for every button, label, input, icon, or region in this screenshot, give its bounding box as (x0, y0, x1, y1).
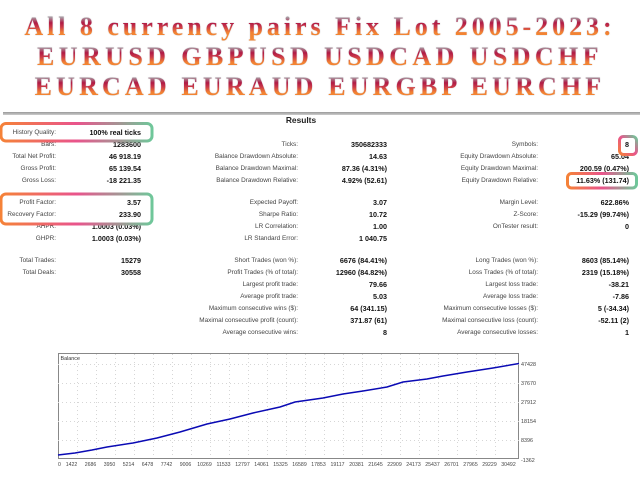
x axis labels: 16589 (292, 462, 307, 468)
y axis labels: 27912 (521, 400, 536, 406)
x axis labels: 0 (58, 462, 61, 468)
box: equity drawdown relative (568, 174, 636, 188)
left column statistics: GHPR: (36, 235, 56, 242)
left column statistics: Gross Loss: (22, 177, 56, 184)
middle column statistics: Largest profit trade: (243, 281, 298, 288)
x axis labels: 17853 (311, 462, 326, 468)
x axis labels: 9006 (180, 462, 191, 468)
left column statistics: 46 918.19 (109, 152, 141, 161)
right column statistics: Loss Trades (% of total): (469, 269, 538, 276)
right column statistics: 2319 (15.18%) (582, 268, 629, 277)
left column statistics: Total Net Profit: (12, 153, 56, 160)
middle column statistics: 3.07 (373, 198, 387, 207)
left column statistics (7, 128, 141, 277)
x axis labels (58, 462, 516, 468)
x axis labels: 7742 (161, 462, 172, 468)
right column statistics: Equity Drawdown Maximal: (461, 165, 538, 172)
middle column statistics: 1.00 (373, 222, 387, 231)
balance chart (58, 353, 536, 468)
middle column statistics: 10.72 (369, 210, 387, 219)
left column statistics: Recovery Factor: (7, 211, 56, 218)
right column statistics: 1 (625, 328, 629, 337)
left column statistics: AHPR: (36, 223, 56, 230)
middle column statistics (199, 140, 387, 337)
right column statistics: Maximal consecutive loss (count): (442, 317, 538, 324)
right column statistics: 11.63% (131.74) (576, 176, 629, 185)
x axis labels: 25437 (425, 462, 440, 468)
chart label: Balance (60, 356, 80, 362)
middle column statistics: Sharpe Ratio: (259, 211, 298, 218)
left column statistics: Total Deals: (23, 269, 56, 276)
middle column statistics: 350682333 (351, 140, 387, 149)
left column statistics: History Quality: (13, 129, 56, 136)
y axis labels: 47428 (521, 362, 536, 368)
x axis labels: 21645 (368, 462, 383, 468)
x axis labels: 29229 (482, 462, 497, 468)
left column statistics: 1.0003 (0.03%) (92, 222, 141, 231)
right column statistics: 0 (625, 222, 629, 231)
x axis labels: 12797 (235, 462, 250, 468)
x axis labels: 2686 (85, 462, 96, 468)
middle column statistics: 14.63 (369, 152, 387, 161)
right column statistics: 5 (-34.34) (598, 304, 629, 313)
middle column statistics: Balance Drawdown Relative: (216, 177, 298, 184)
right column statistics: -52.11 (2) (598, 316, 629, 325)
middle column statistics: 5.03 (373, 292, 387, 301)
left column statistics: 100% real ticks (89, 128, 141, 137)
left column statistics: Gross Profit: (20, 165, 56, 172)
right column statistics: OnTester result: (493, 223, 538, 230)
right column statistics: Long Trades (won %): (475, 257, 538, 264)
right column statistics (442, 140, 629, 337)
right column statistics: Symbols: (512, 141, 538, 148)
y axis labels (521, 362, 536, 464)
middle column statistics: 6676 (84.41%) (340, 256, 387, 265)
x axis labels: 1422 (66, 462, 77, 468)
left column statistics: 1283600 (113, 140, 141, 149)
box: profit and recovery factor (1, 194, 152, 224)
middle column statistics: Profit Trades (% of total): (227, 269, 298, 276)
title line 1: All 8 currency pairs Fix Lot 2005-2023: (24, 12, 616, 41)
middle column statistics: 12960 (84.82%) (336, 268, 387, 277)
y axis labels: 8396 (521, 438, 533, 444)
x axis labels: 27965 (463, 462, 478, 468)
title line 3: EURCAD EURAUD EURGBP EURCHF (35, 72, 605, 101)
x axis labels: 10269 (197, 462, 212, 468)
left column statistics: 3.57 (127, 198, 141, 207)
middle column statistics: Expected Payoff: (250, 199, 298, 206)
right column statistics: -38.21 (609, 280, 629, 289)
right column statistics: Average loss trade: (483, 293, 538, 300)
middle column statistics: 87.36 (4.31%) (342, 164, 387, 173)
y axis labels: -1362 (521, 458, 535, 464)
right column statistics: Equity Drawdown Relative: (462, 177, 538, 184)
middle column statistics: Maximum consecutive wins ($): (209, 305, 298, 312)
left column statistics: -18 221.35 (107, 176, 141, 185)
right column statistics: 622.86% (601, 198, 629, 207)
x axis labels: 5214 (123, 462, 134, 468)
right column statistics: 65.04 (611, 152, 629, 161)
x axis labels: 30492 (501, 462, 516, 468)
chart frame (58, 354, 518, 458)
right column statistics: Z-Score: (513, 211, 538, 218)
x axis labels: 11533 (216, 462, 231, 468)
x axis labels: 14061 (254, 462, 269, 468)
right column statistics: Maximum consecutive losses ($): (444, 305, 538, 312)
right column statistics: 8 (625, 140, 629, 149)
middle column statistics: Balance Drawdown Maximal: (216, 165, 298, 172)
middle column statistics: LR Standard Error: (244, 235, 298, 242)
right column statistics: -7.86 (613, 292, 629, 301)
middle column statistics: Average consecutive wins: (222, 329, 298, 336)
left column statistics: Profit Factor: (19, 199, 56, 206)
left column statistics: 1.0003 (0.03%) (92, 234, 141, 243)
x axis labels: 22909 (387, 462, 402, 468)
right column statistics: 8603 (85.14%) (582, 256, 629, 265)
x axis labels: 15325 (273, 462, 288, 468)
middle column statistics: Short Trades (won %): (234, 257, 298, 264)
x axis labels: 26701 (444, 462, 459, 468)
title line 2: EURUSD GBPUSD USDCAD USDCHF (37, 42, 603, 71)
middle column statistics: 8 (383, 328, 387, 337)
y axis labels: 18154 (521, 419, 536, 425)
middle column statistics: 371.87 (61) (350, 316, 387, 325)
x axis labels: 20381 (349, 462, 364, 468)
left column statistics: 65 139.54 (109, 164, 141, 173)
x axis labels: 3950 (104, 462, 115, 468)
left column statistics: 15279 (121, 256, 141, 265)
right column statistics: Margin Level: (500, 199, 538, 206)
right column statistics: -15.29 (99.74%) (577, 210, 629, 219)
x axis labels: 6478 (142, 462, 153, 468)
x axis labels: 19117 (330, 462, 345, 468)
left column statistics: Total Trades: (19, 257, 56, 264)
right column statistics: Largest loss trade: (485, 281, 538, 288)
middle column statistics: Ticks: (282, 141, 298, 148)
middle column statistics: Maximal consecutive profit (count): (199, 317, 298, 324)
results table (7, 128, 629, 337)
left column statistics: 233.90 (119, 210, 141, 219)
right column statistics: 200.59 (0.47%) (580, 164, 629, 173)
middle column statistics: Balance Drawdown Absolute: (215, 153, 298, 160)
x axis labels: 24173 (406, 462, 421, 468)
middle column statistics: 79.66 (369, 280, 387, 289)
box: symbols (620, 136, 636, 154)
right column statistics: Equity Drawdown Absolute: (460, 153, 538, 160)
middle column statistics: 64 (341.15) (350, 304, 387, 313)
middle column statistics: Average profit trade: (240, 293, 298, 300)
results heading: Results (286, 115, 316, 125)
right column statistics: Average consecutive losses: (457, 329, 538, 336)
middle column statistics: 4.92% (52.61) (342, 176, 387, 185)
title (24, 12, 616, 101)
left column statistics: Bars: (41, 141, 56, 148)
highlight boxes (0, 122, 638, 226)
balance line (58, 364, 519, 455)
y axis labels: 37670 (521, 381, 536, 387)
middle column statistics: LR Correlation: (255, 223, 298, 230)
middle column statistics: 1 040.75 (359, 234, 387, 243)
left column statistics: 30558 (121, 268, 141, 277)
box: history quality (1, 124, 152, 141)
